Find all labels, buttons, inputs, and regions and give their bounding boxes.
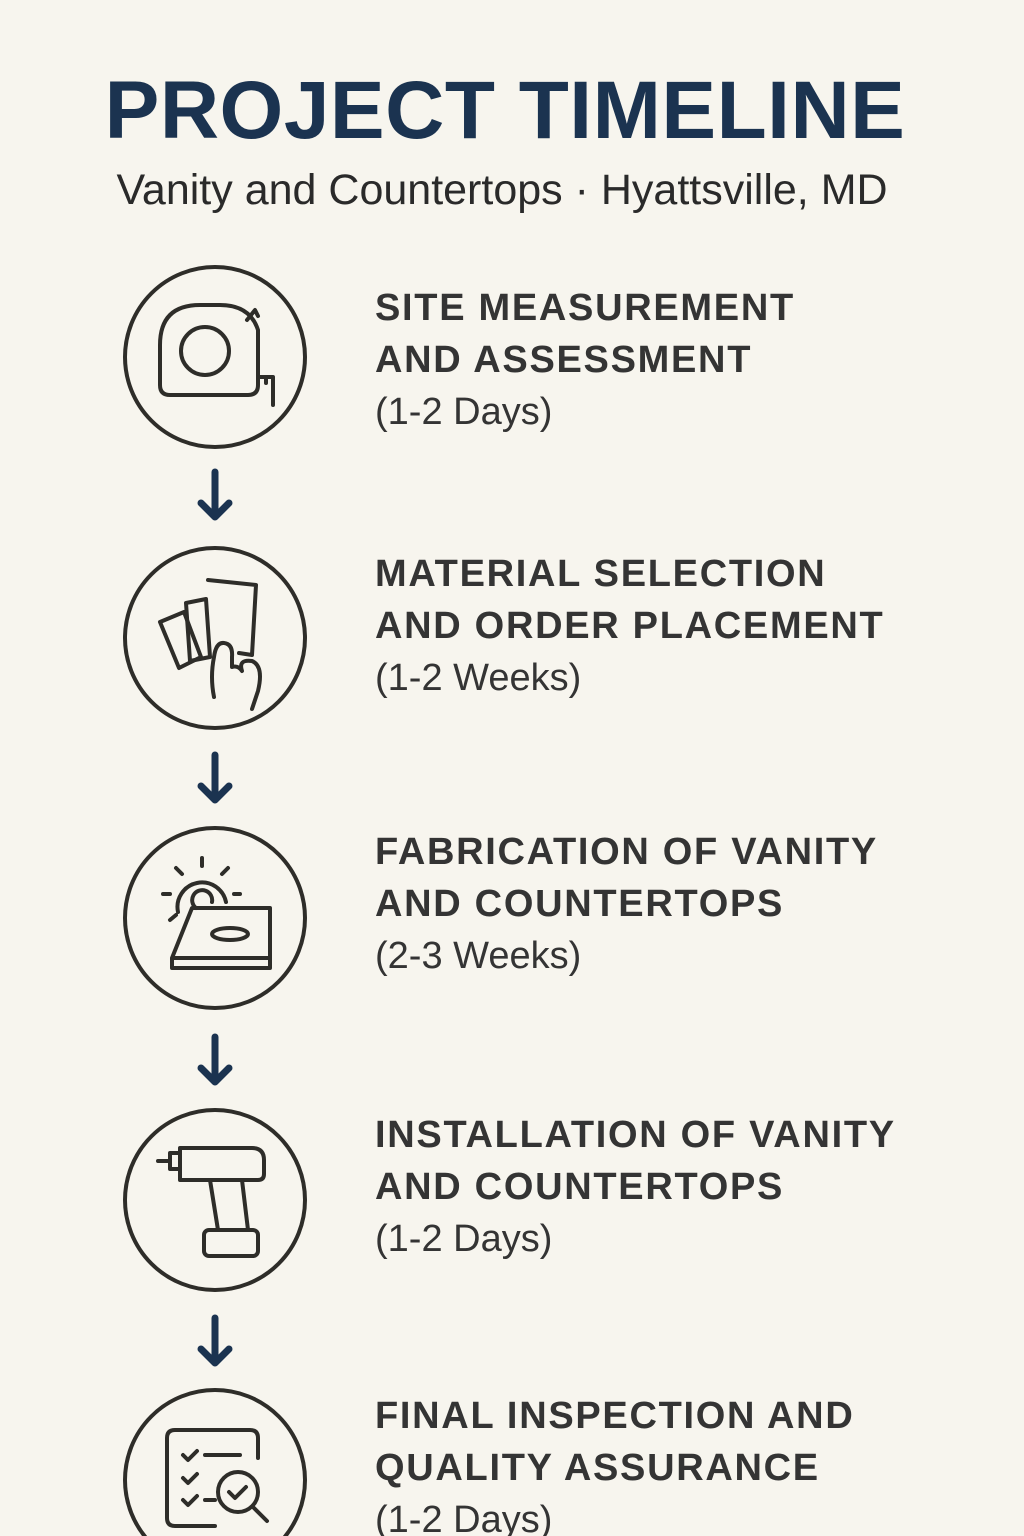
step 2 text: AND ORDER PLACEMENT [375, 605, 884, 647]
step 1 text: AND ASSESSMENT [375, 339, 752, 381]
step 5 text [375, 1395, 854, 1536]
title: PROJECT TIMELINE [105, 65, 905, 156]
arrow 1 [201, 472, 229, 517]
step 2 text: MATERIAL SELECTION [375, 553, 826, 595]
step 5 text: QUALITY ASSURANCE [375, 1447, 820, 1489]
arrow 2 [201, 755, 229, 800]
step 4 text: (1-2 Days) [375, 1218, 552, 1260]
icon: drill [125, 1110, 305, 1290]
step 3 text: AND COUNTERTOPS [375, 883, 784, 925]
step 3 text: FABRICATION OF VANITY [375, 831, 878, 873]
icon: gear and slab [125, 828, 305, 1008]
subtitle: Vanity and Countertops · Hyattsville, MD [116, 166, 888, 214]
step 2 text [375, 553, 884, 699]
icon: material cards [125, 548, 305, 728]
step 5 text: FINAL INSPECTION AND [375, 1395, 854, 1437]
icon: tape measure [125, 267, 305, 447]
step 2 text: (1-2 Weeks) [375, 657, 581, 699]
step 1 text: (1-2 Days) [375, 391, 552, 433]
step 1 text: SITE MEASUREMENT [375, 287, 795, 329]
step 4 text: AND COUNTERTOPS [375, 1166, 784, 1208]
icon: checklist [125, 1390, 305, 1536]
step 4 text [375, 1114, 896, 1260]
arrow 3 [201, 1037, 229, 1082]
step 4 text: INSTALLATION OF VANITY [375, 1114, 896, 1156]
step 3 text [375, 831, 878, 977]
step 3 text: (2-3 Weeks) [375, 935, 581, 977]
step 1 text [375, 287, 795, 433]
arrow 4 [201, 1318, 229, 1363]
